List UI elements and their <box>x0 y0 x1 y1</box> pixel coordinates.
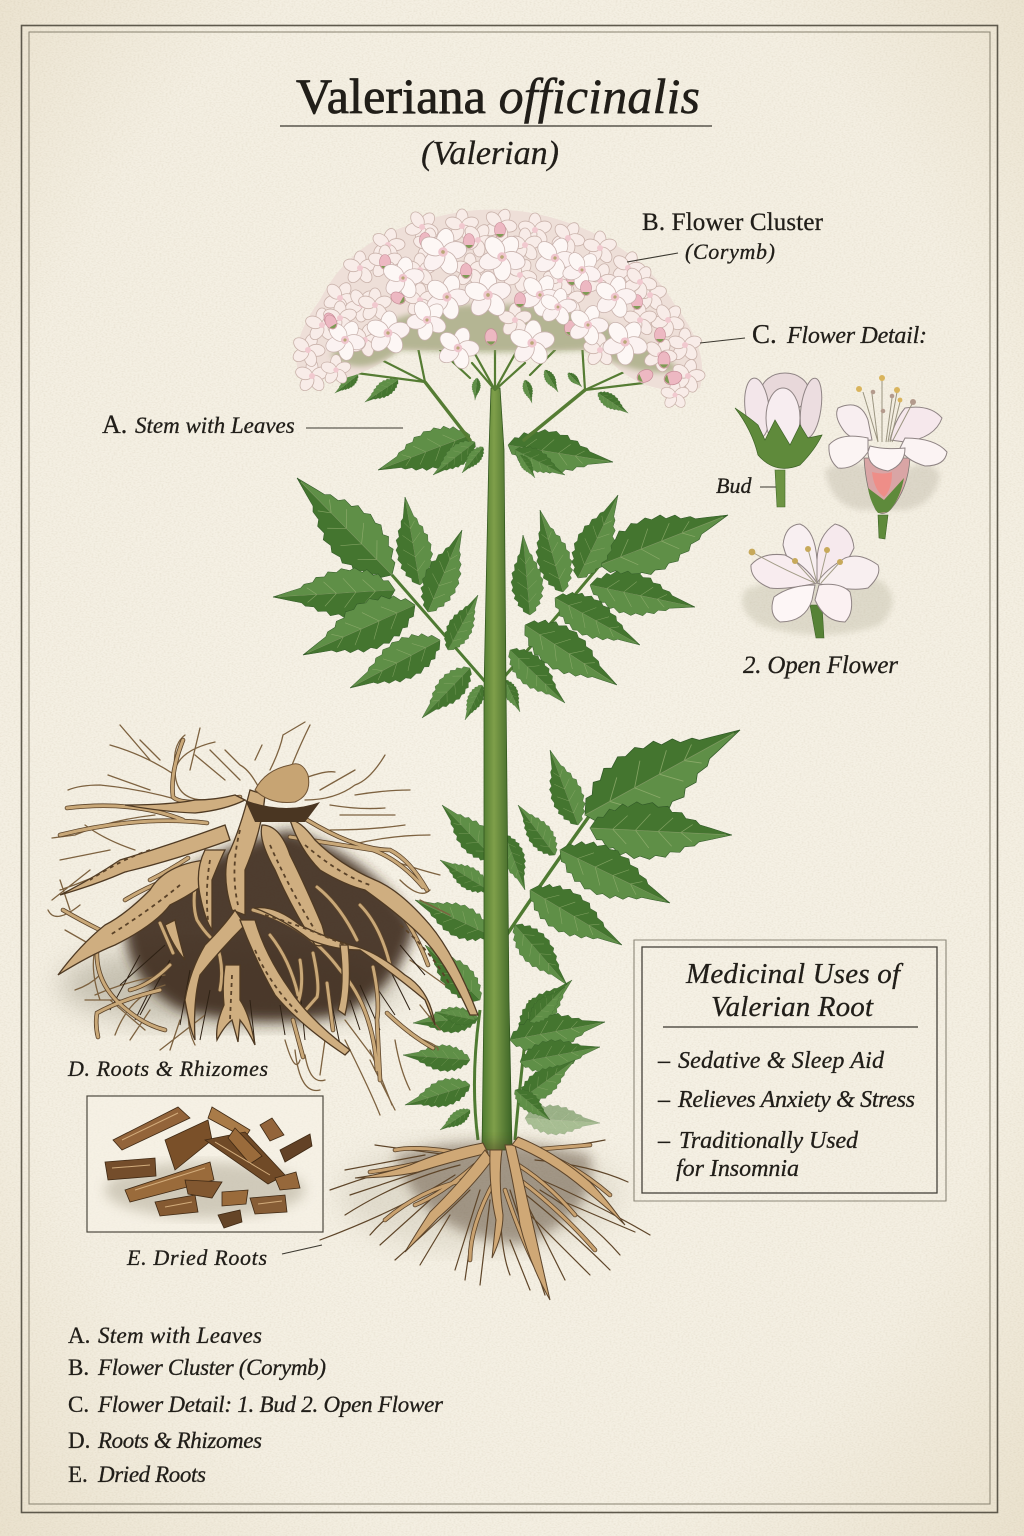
title: Valeriana officinalis <box>296 68 700 124</box>
leaf: top bracts <box>371 417 616 488</box>
dark rootlets <box>110 945 425 1045</box>
label: dried roots: E. Dried Roots <box>126 1245 267 1270</box>
medium roots fill <box>60 740 433 1080</box>
label: C flower detail: C. <box>752 319 777 349</box>
plant: main stem and leaves <box>272 388 757 1150</box>
main stem <box>482 388 512 1150</box>
root markings <box>90 830 450 1020</box>
base root shadow <box>340 1140 620 1250</box>
base rootlets <box>320 1140 650 1295</box>
panel list: Sedative & Sleep Aid <box>678 1048 885 1074</box>
buds <box>321 222 666 342</box>
medium roots outline <box>60 740 433 1080</box>
panel list <box>657 1048 915 1182</box>
label: A stem with leaves: Stem with Leaves <box>135 413 295 438</box>
open flowers <box>316 223 658 376</box>
legend: B. <box>68 1355 89 1380</box>
panel frame <box>634 940 946 1201</box>
label: open flower: 2. Open Flower <box>743 652 898 679</box>
base main roots <box>355 1137 625 1300</box>
icon: flower cross section <box>825 375 947 539</box>
panel list: Traditionally Used <box>679 1128 859 1154</box>
flower cluster <box>285 202 710 410</box>
panel heading: Valerian Root <box>711 991 874 1023</box>
label: roots and rhizomes: D. Roots & Rhizomes <box>67 1056 268 1081</box>
title <box>280 68 712 172</box>
title: (Valerian) <box>421 135 559 172</box>
label: B flower cluster <box>642 209 824 264</box>
base medium roots outline <box>370 1145 610 1265</box>
icon: flower bud <box>735 373 825 507</box>
dried root pieces <box>105 1107 312 1228</box>
leader lines <box>282 253 777 1254</box>
leaf: upper right compound leaf <box>497 487 738 715</box>
legend: A. <box>68 1323 90 1348</box>
panel list: Relieves Anxiety & Stress <box>677 1087 915 1113</box>
base medium roots fill <box>370 1145 610 1265</box>
legend: Stem with Leaves <box>98 1323 262 1348</box>
label: A stem with leaves: A. <box>102 410 127 439</box>
root shadows <box>60 830 415 1027</box>
panel list: – <box>658 1128 670 1154</box>
panel list: for Insomnia <box>676 1156 799 1182</box>
leaf: upper left compound leaf <box>272 459 489 728</box>
panel heading <box>663 958 918 1027</box>
legend: Flower Cluster (Corymb) <box>97 1355 326 1380</box>
legend: Dried Roots <box>97 1462 206 1487</box>
label: B flower cluster: (Corymb) <box>685 239 775 264</box>
label: bud: Bud <box>716 473 752 498</box>
lower buds <box>322 280 683 387</box>
rhizome crown <box>255 764 309 802</box>
legend: Flower Detail: 1. Bud 2. Open Flower <box>97 1392 444 1417</box>
panel: dried roots <box>87 1096 323 1232</box>
panel list: – <box>658 1048 670 1074</box>
illustration: plant base roots <box>320 1137 650 1300</box>
legend: E. <box>68 1462 88 1487</box>
legend <box>68 1323 444 1487</box>
legend: C. <box>68 1392 89 1417</box>
thick roots <box>58 790 478 1055</box>
leaf: lower compound leaf <box>408 699 757 1011</box>
leaf group: lower basal shoots <box>401 970 609 1140</box>
pale outer flowers <box>285 202 710 410</box>
panel list: – <box>658 1087 670 1113</box>
illustration: roots and rhizomes <box>48 722 478 1115</box>
label: B flower cluster: B. Flower Cluster <box>642 209 824 236</box>
panel heading: Medicinal Uses of <box>685 958 904 990</box>
panel: medicinal uses <box>634 940 946 1201</box>
legend: Roots & Rhizomes <box>97 1428 262 1453</box>
icon: open flower <box>742 524 892 638</box>
fine rootlets <box>48 722 450 1115</box>
flower branch stems <box>318 333 668 440</box>
legend: D. <box>68 1428 90 1453</box>
label: C flower detail: Flower Detail: <box>786 323 927 349</box>
